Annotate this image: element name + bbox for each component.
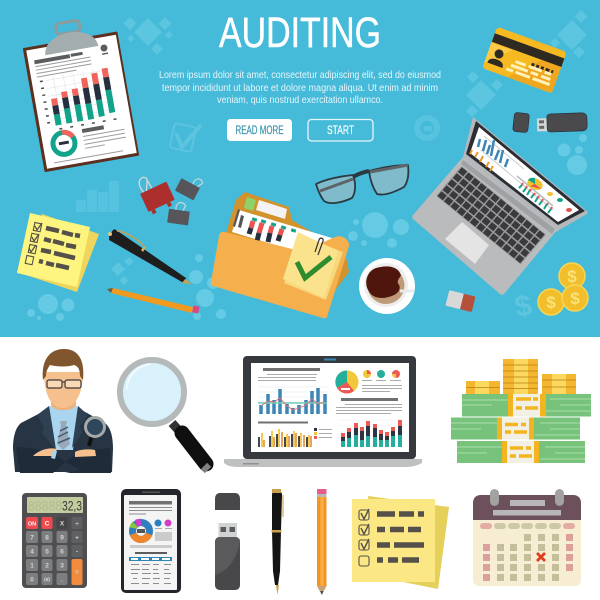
trackpad xyxy=(445,222,489,264)
button: read more: READ MORE xyxy=(236,125,284,137)
keyboard xyxy=(436,166,546,265)
display xyxy=(27,497,83,513)
top banknote stack xyxy=(462,394,591,416)
icon: magnifying glass xyxy=(120,360,208,470)
small charts xyxy=(154,520,172,541)
icon: calendar xyxy=(473,489,581,586)
chart: stacked bars xyxy=(338,420,404,447)
icon: laptop with dashboard xyxy=(224,356,422,467)
tie xyxy=(57,421,70,450)
button labels: C xyxy=(45,520,50,528)
icon: calculator: 88888 xyxy=(28,498,62,514)
coffee xyxy=(368,267,404,304)
title: AUDITING xyxy=(219,9,381,57)
usb connector xyxy=(218,523,237,537)
weekday pills xyxy=(480,523,575,529)
button labels: 7 xyxy=(30,534,34,542)
laptop screen pie xyxy=(525,176,572,212)
icon: pen xyxy=(272,489,283,595)
button labels: ÷ xyxy=(75,520,79,528)
card photo xyxy=(487,47,508,68)
background icon: faint dollar: $ xyxy=(512,289,535,324)
laptop base xyxy=(412,157,558,295)
icon: sticky note checklist xyxy=(352,496,449,589)
folder back xyxy=(215,192,349,312)
icon: gold coins xyxy=(538,263,588,315)
button labels: 6 xyxy=(60,548,64,556)
background decorations: diamonds xyxy=(111,10,588,285)
icon: gold coins: $ xyxy=(546,293,556,312)
icon: calculator: 32,3 xyxy=(62,498,82,514)
icon: binder clips xyxy=(134,169,204,225)
buttons xyxy=(26,517,82,585)
button labels: 00 xyxy=(44,578,50,584)
icon: usb drive xyxy=(215,493,240,590)
hair xyxy=(43,349,83,380)
button labels: + xyxy=(75,534,79,542)
icon: gold coins: $ xyxy=(570,289,580,308)
button: start xyxy=(308,120,373,141)
button labels: . xyxy=(61,576,63,584)
stacked bars xyxy=(50,68,113,125)
icon: money and coins xyxy=(451,359,591,463)
button labels: X xyxy=(60,520,65,528)
bottom banknote stack xyxy=(457,441,585,463)
button labels: 3 xyxy=(60,562,64,570)
text block: intro paragraph xyxy=(159,69,441,106)
right text lines xyxy=(336,380,402,414)
button: start: START xyxy=(327,125,354,137)
checkboxes xyxy=(25,222,42,265)
background icon: faint check box xyxy=(170,123,201,152)
chart grid xyxy=(45,66,118,127)
icon: eraser xyxy=(445,290,476,312)
small pie charts xyxy=(363,370,400,378)
usb cap xyxy=(215,493,240,510)
icon: sticky notes with checklist xyxy=(17,213,99,292)
background icon: faint bar chart xyxy=(76,181,119,212)
coin stacks xyxy=(466,359,576,394)
folder paper xyxy=(232,210,345,264)
button labels: 5 xyxy=(45,548,49,556)
button labels: ON xyxy=(28,522,36,528)
text lines xyxy=(49,122,128,163)
icon: calculator xyxy=(22,493,87,588)
button labels: 8 xyxy=(45,534,49,542)
icon: folder with sticky note xyxy=(211,192,349,318)
laptop lid xyxy=(463,117,588,233)
button labels: = xyxy=(75,569,79,576)
report header xyxy=(129,501,172,514)
icon: gold coins: $ xyxy=(567,267,577,286)
button labels: 4 xyxy=(30,548,34,556)
rings xyxy=(490,489,564,506)
green check mark xyxy=(297,257,331,278)
chart: blue bars xyxy=(258,387,328,414)
chart legend xyxy=(314,428,332,439)
background icon: faint donut xyxy=(417,118,437,138)
weekend squares xyxy=(483,534,573,581)
text block: intro paragraph: Lorem ipsum dolor sit amet, consectetur adipiscing elit, sed do eiusmod xyxy=(159,69,441,81)
button labels: 2 xyxy=(45,562,49,570)
icon: auditor person xyxy=(13,349,113,473)
paperclip xyxy=(315,238,323,255)
crossed arms xyxy=(16,447,111,473)
text block: intro paragraph: tempor incididunt ut labore et dolore magna aliqua. Ut enim ad minim xyxy=(162,82,438,94)
gray clip xyxy=(175,171,204,200)
folder tab xyxy=(244,197,287,219)
eye glasses xyxy=(47,380,81,388)
middle banknote stack xyxy=(451,418,580,440)
calendar header bars xyxy=(493,500,561,516)
card number and lines xyxy=(531,63,554,73)
header lines xyxy=(33,44,110,78)
report table xyxy=(129,545,172,584)
gray clip xyxy=(167,201,191,225)
small magnifier xyxy=(86,418,104,446)
icon: usb flash drive xyxy=(512,110,587,133)
checklist lines xyxy=(377,514,424,560)
donut chart xyxy=(132,522,150,540)
icon: black pen xyxy=(108,229,192,284)
marked date xyxy=(537,553,545,561)
icon: laptop xyxy=(412,117,588,295)
panel: blue top banner xyxy=(0,0,600,337)
background decorations: bubbles xyxy=(27,134,587,321)
sticky note xyxy=(284,236,343,300)
donut chart xyxy=(51,131,77,156)
icon: orange pencil xyxy=(107,288,200,314)
icon: credit card xyxy=(482,27,567,93)
clip xyxy=(40,17,99,55)
button labels: 0 xyxy=(30,576,34,584)
axis ticks xyxy=(40,70,116,131)
neck and face xyxy=(51,395,76,410)
text block: intro paragraph: veniam, quis nostrud exercitation ullamco. xyxy=(217,94,383,106)
button labels: 1 xyxy=(30,562,34,570)
laptop base xyxy=(224,459,422,467)
jacket xyxy=(13,408,113,472)
button labels xyxy=(28,520,79,584)
usb body xyxy=(215,537,240,590)
folder front xyxy=(211,232,349,318)
checklist lines xyxy=(39,228,80,268)
date squares xyxy=(497,534,559,581)
button: read more xyxy=(227,119,292,141)
icon: tablet report xyxy=(121,489,181,593)
icon: coffee cup xyxy=(359,258,415,314)
pie chart xyxy=(335,370,358,394)
chart: orange bars xyxy=(258,422,311,447)
icon: pencil xyxy=(317,489,326,595)
red clip xyxy=(134,169,177,216)
check boxes xyxy=(359,509,369,566)
laptop screen charts xyxy=(470,136,553,213)
button labels: 9 xyxy=(60,534,64,542)
shirt xyxy=(49,406,78,450)
icon: clipboard with bar chart xyxy=(20,14,139,172)
dashboard heading lines xyxy=(258,368,320,381)
hands xyxy=(33,448,96,457)
icon: glasses xyxy=(316,165,408,203)
lapels xyxy=(37,406,88,450)
button labels: - xyxy=(76,548,78,556)
